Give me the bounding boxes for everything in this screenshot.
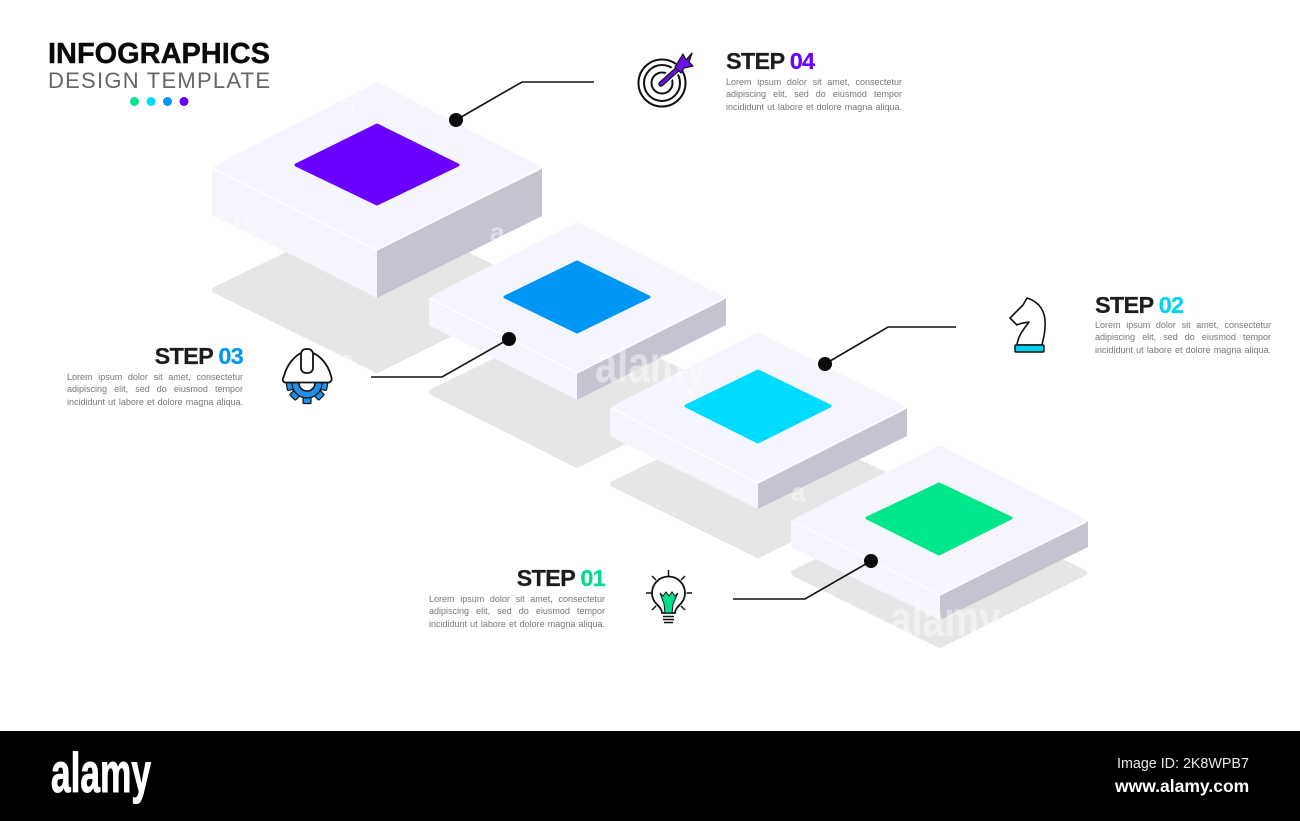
stock watermarks [212,91,1001,647]
purple square [296,125,458,204]
text: step 04: STEP 04 [726,48,814,74]
connector: step 03 [371,332,516,377]
blue square [505,262,649,332]
step 03 platform [429,226,726,400]
alamy logo: alamy [51,742,151,804]
text: step 01: incididunt ut labore et dolore magna aliqua. [429,619,605,629]
icon: light bulb [646,570,692,622]
text: step 03: adipiscing elit, sed do eiusmod tempor [67,384,243,394]
stock watermarks: all [212,207,252,248]
stock watermarks: a [791,477,806,507]
stock watermarks: a [490,217,505,247]
stock watermarks: alamy [595,335,707,393]
green square [867,484,1011,554]
text: step 01: adipiscing elit, sed do eiusmod tempor [429,606,605,616]
footer bar [0,731,1300,821]
text: step 01: STEP 01 [517,565,605,591]
title: DESIGN TEMPLATE [48,68,270,93]
text: step 04: incididunt ut labore et dolore magna aliqua. [726,102,902,112]
stock watermarks: a [342,91,356,118]
title: INFOGRAPHICS [48,38,270,70]
text: step 04: adipiscing elit, sed do eiusmod tempor [726,89,902,99]
icon: helmet with gear [283,349,332,404]
connector: step 04 [449,82,594,127]
title colour dots [130,97,188,106]
connector: step 02 [818,327,956,371]
text: step 02 [1095,292,1271,355]
block shadows [215,211,1084,645]
text: step 02: Lorem ipsum dolor sit amet, consectetur [1095,320,1271,330]
text: step 03: STEP 03 [155,343,243,369]
text: step 01 [429,565,606,629]
step 01 platform [791,448,1088,620]
stock watermarks: alamy [890,590,1001,647]
website: www.alamy.com [1114,776,1249,796]
icon: chess knight [1010,298,1045,352]
text: step 04 [726,48,902,112]
stock watermarks: a [340,347,354,374]
text: step 02: STEP 02 [1095,292,1183,318]
image id: Image ID: 2K8WPB7 [1117,756,1249,772]
connector: step 01 [733,554,878,599]
step 04 platform [212,86,542,298]
title [48,38,270,93]
cyan square [686,371,830,442]
text: step 04: Lorem ipsum dolor sit amet, consectetur [726,76,902,86]
text: step 03: Lorem ipsum dolor sit amet, consectetur [67,372,243,382]
text: step 03: incididunt ut labore et dolore magna aliqua. [67,397,243,407]
step 02 platform [610,336,907,509]
text: step 03 [67,343,243,407]
icon: target with dart [638,53,693,106]
text: step 02: adipiscing elit, sed do eiusmod tempor [1095,332,1271,342]
text: step 02: incididunt ut labore et dolore magna aliqua. [1095,345,1271,355]
text: step 01: Lorem ipsum dolor sit amet, consectetur [429,594,605,604]
